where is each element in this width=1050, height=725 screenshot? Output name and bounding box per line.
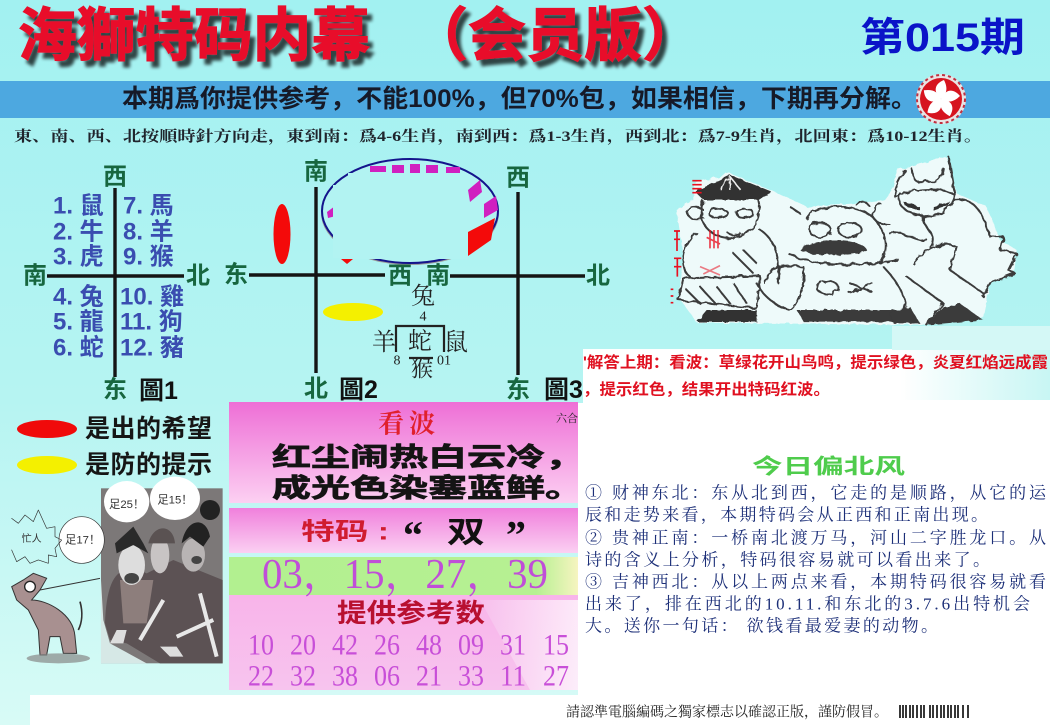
panel: special code: 特码 : (301, 518, 389, 546)
chart: figure 1 zodiac compass: 北 (186, 262, 210, 290)
last issue answer text: ，提示红色，结果开出特码红波。 (583, 380, 830, 398)
chart: figure 3 compass: 东 (506, 376, 530, 404)
last issue answer text (583, 352, 1049, 398)
chart: figure 3 compass (426, 164, 610, 404)
legend: 是出的希望 (85, 415, 212, 443)
number row 1 (248, 628, 569, 662)
panel: main numbers: 03，15，27，39 (262, 552, 548, 598)
marker: red oval (274, 204, 290, 264)
issue number: 第015期 (860, 16, 1025, 60)
panel: poem (229, 402, 584, 503)
analysis paragraph: ② 贵神正南：一桥南北渡万马，河山二字胜龙口。从 (585, 528, 1046, 548)
white answer area (30, 326, 1050, 725)
number row 1: 26 (374, 628, 400, 662)
chart: figure 1 zodiac compass (23, 164, 210, 405)
illustration: dog and crowd comic (12, 477, 223, 663)
residual red marks (671, 181, 720, 303)
chart: figure 2 compass: 西 (388, 262, 412, 290)
chart: figure 1 zodiac compass: 2. 牛 (53, 218, 104, 246)
panel: special code: ” (506, 512, 526, 558)
speech bubbles: 足17！ (65, 535, 100, 547)
analysis paragraph: 大。送你一句话： 欲钱看最爱妻的动物。 (585, 616, 938, 636)
speech bubbles: 足25！ (109, 499, 144, 511)
zodiac cross diagram: 4 (420, 310, 426, 324)
number row 2: 32 (290, 660, 316, 692)
dog (12, 573, 100, 663)
chart: figure 1 zodiac compass: 东 (103, 376, 127, 404)
chart: figure 3 compass: 北 (586, 262, 610, 290)
chart: figure 2 compass (224, 158, 412, 404)
panel: reference numbers (229, 595, 578, 692)
analysis paragraph: 辰和走势来看，本期特码会从正西和正南出现。 (585, 506, 988, 524)
character: middle ox (757, 202, 905, 322)
analysis paragraph: ① 财神东北：东从北到西，它走的是顺路，从它的运 (585, 484, 1047, 502)
poem lines: 红尘闹热白云冷， (272, 442, 584, 472)
poem lines (272, 442, 584, 503)
zodiac cross diagram: 01 (437, 354, 451, 368)
chart: figure 1 zodiac compass: 1. 鼠 (53, 192, 104, 220)
zodiac cross diagram: 8 (394, 354, 400, 368)
barcode (900, 705, 968, 718)
chart: figure 3 compass: 西 (506, 164, 530, 192)
chart: figure 1 zodiac compass: 4. 兔 (53, 284, 104, 310)
chart: figure 1 zodiac compass: 3. 虎 (53, 244, 104, 270)
speech bubbles: 足15！ (157, 495, 193, 507)
thought cloud: 忙人 (22, 532, 42, 545)
illustration: three cartoon characters (671, 157, 1017, 325)
number row 2: 21 (416, 660, 442, 692)
number row 2: 11 (500, 660, 526, 692)
last issue answer text: '解答上期：看波：草绿花开山鸟鸣，提示绿色，炎夏红焰远成霞 (583, 352, 1049, 372)
analysis paragraph: 出来了，排在西北的10.11.和东北的3.7.6出特机会 (585, 594, 1030, 614)
character: left official (678, 175, 779, 322)
small cut-off label: 六合 (556, 411, 578, 425)
chart: figure 1 zodiac compass: 8. 羊 (123, 218, 174, 246)
chart: figure 2 compass: 东 (224, 262, 248, 288)
number row 1: 48 (416, 628, 442, 662)
number row 1: 15 (543, 628, 569, 662)
number row 1: 20 (290, 628, 316, 662)
chart: figure 1 zodiac compass: 11. 狗 (120, 308, 183, 336)
chart: figure 1 zodiac compass: 9. 猴 (123, 244, 174, 270)
panel: special code: 双 (447, 516, 485, 550)
chart: figure 1 zodiac compass: 5. 龍 (53, 308, 104, 336)
chart: figure 1 zodiac compass: 7. 馬 (123, 192, 174, 220)
seal: oval stamp behind figure 2 (322, 159, 498, 264)
zodiac cross diagram: 猴 (411, 356, 433, 382)
label: wave heading: 看波 (378, 410, 435, 438)
title: 海獅特码内幕 (18, 4, 370, 68)
chart: figure 1 zodiac compass: 南 (23, 262, 47, 290)
title: （会员版） (410, 4, 700, 68)
chart: figure 2 compass: 南 (304, 158, 328, 186)
heading: reference numbers: 提供参考数 (337, 598, 485, 628)
poem lines: 成光色染塞蓝鲜。 (272, 473, 584, 503)
zodiac cross diagram: 羊 (372, 329, 396, 356)
banner text: 本期爲你提供参考，不能100%，但70%包，如果相信，下期再分解。 (122, 84, 917, 113)
number row 2: 38 (332, 660, 358, 692)
icon: Hong Kong emblem (916, 74, 966, 124)
number row 2: 06 (374, 660, 400, 692)
panel: special code: “ (403, 512, 423, 558)
chart: figure 3 compass: 南 (426, 262, 450, 290)
chart: figure 1 zodiac compass: 12. 豬 (120, 334, 184, 362)
footer notice: 請認準電腦編碼之獨家標志以確認正版，謹防假冒。 (566, 704, 888, 720)
title (18, 4, 700, 68)
number row 2: 33 (458, 660, 484, 692)
chart: figure 1 zodiac compass: 10. 雞 (120, 284, 184, 310)
zodiac cross diagram: 兔 (411, 283, 435, 310)
number row 1: 31 (500, 628, 526, 662)
panel: special code (229, 508, 578, 558)
chart: figure 1 zodiac compass: 6. 蛇 (53, 334, 104, 362)
number row 2: 27 (543, 660, 569, 692)
crowd panel (101, 488, 223, 663)
chart: figure 1 zodiac compass: 圖1 (139, 377, 178, 405)
number row 2: 22 (248, 660, 274, 692)
zodiac cross diagram: 鼠 (444, 329, 468, 356)
marker: yellow oval (323, 303, 383, 321)
number row 1: 10 (248, 628, 274, 662)
analysis paragraph: ③ 吉神西北：从以上两点来看，本期特码很容易就看 (585, 572, 1046, 592)
heading: today's wind: 今日偏北风 (752, 454, 905, 478)
analysis paragraph (585, 484, 1047, 636)
analysis paragraph: 诗的含义上分析，特码很容易就可以看出来了。 (585, 550, 990, 570)
chart: figure 1 zodiac compass: 西 (103, 164, 127, 190)
number row 1: 42 (332, 628, 358, 662)
chart: figure 2 compass: 北 (304, 376, 328, 402)
zodiac cross diagram: 蛇 (408, 328, 432, 355)
number row 1: 09 (458, 628, 484, 662)
legend: 是防的提示 (85, 451, 212, 479)
zodiac cross diagram (372, 283, 468, 382)
thought cloud (12, 510, 62, 563)
figure 3 label: 圖3 (544, 376, 583, 404)
legend (17, 415, 212, 479)
number row 2 (248, 660, 569, 692)
direction explanation text: 東、南、西、北按順時針方向走，東到南：爲4-6生肖，南到西：爲1-3生肖，西到北：爲7-9生肖，北回東：爲10-12生肖。 (14, 127, 982, 146)
banner (0, 81, 1050, 118)
chart: figure 2 compass: 圖2 (339, 376, 378, 404)
speech bubbles (59, 477, 200, 563)
character: right devil (873, 157, 1017, 325)
